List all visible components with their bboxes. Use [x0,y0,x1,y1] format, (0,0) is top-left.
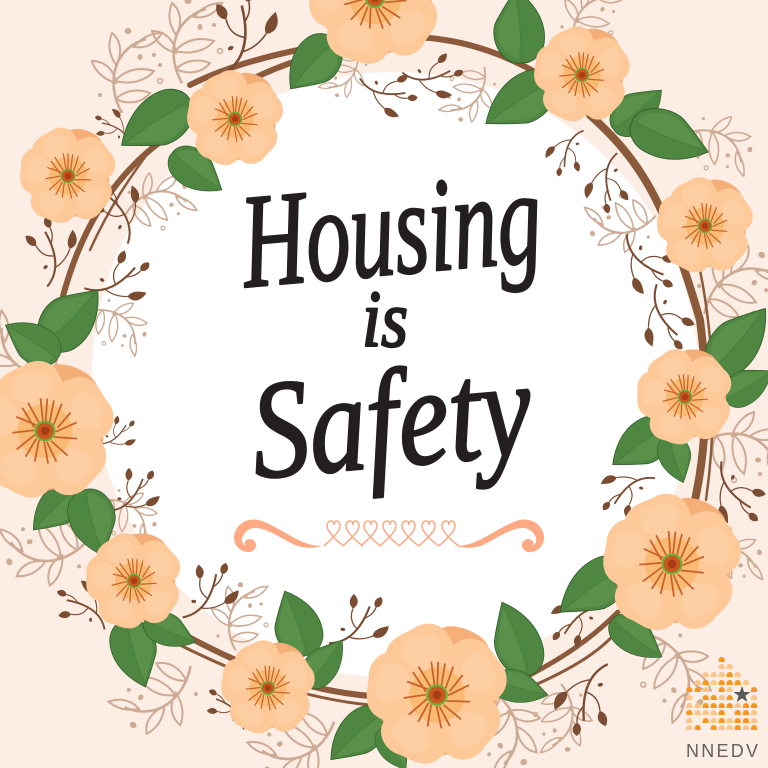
logo mark: house of dots [686,657,757,730]
heading word: Housing: Housing [234,142,547,316]
logo wordmark: NNEDV [686,741,758,761]
heading word: Safety: Safety [245,330,538,509]
wreath branches [63,38,713,705]
logo star [734,686,750,702]
heading word: is: is [362,276,408,364]
white central circle [92,72,698,678]
title: Housing is Safety [234,142,547,509]
row of hearts [324,521,459,546]
logo: NNEDV [686,657,758,761]
left scroll [234,519,322,552]
right scroll [456,519,544,552]
heart flourish ornament [234,519,544,552]
